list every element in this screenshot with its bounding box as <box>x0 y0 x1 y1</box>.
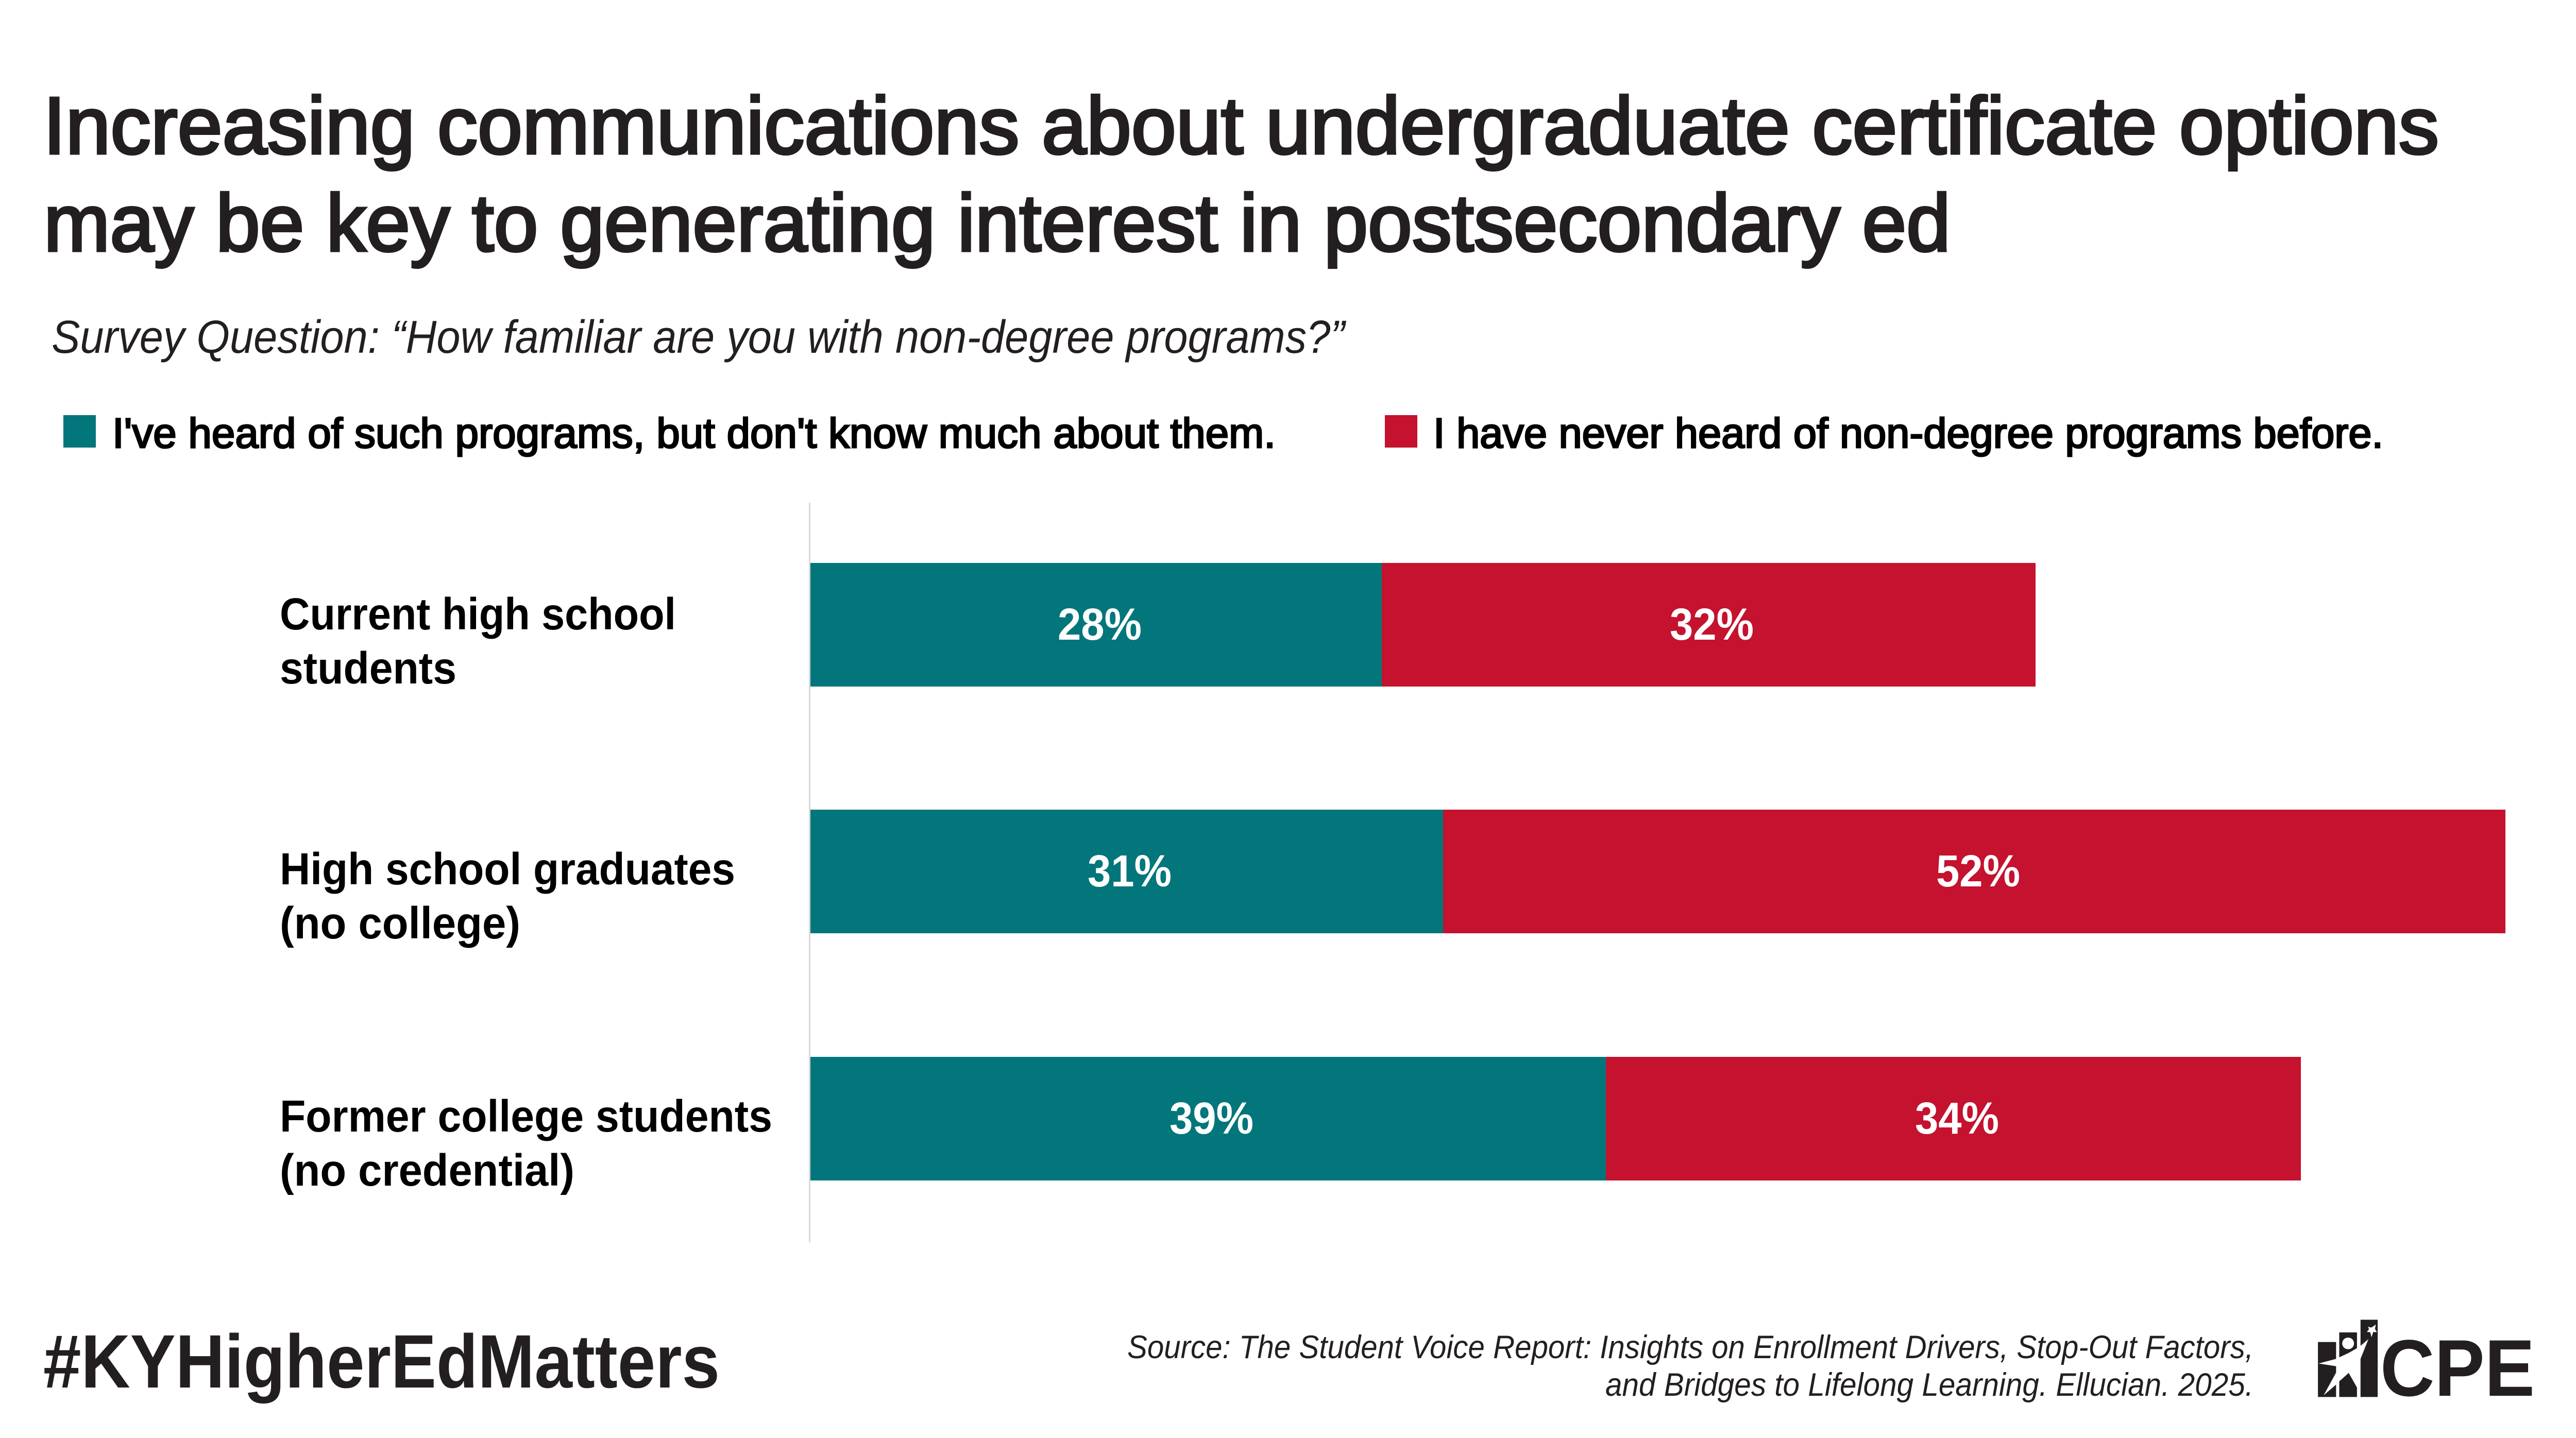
row: current high school students <box>280 563 2036 693</box>
icon: star figure reaching from bars <box>2318 1320 2378 1397</box>
row: former college students: 39% <box>1170 1093 1253 1143</box>
source note: and Bridges to Lifelong Learning. Ellucian. 2025. <box>1605 1367 2253 1403</box>
source note: Source: The Student Voice Report: Insights on Enrollment Drivers, Stop-Out Factors, <box>1127 1329 2253 1365</box>
stacked bar chart <box>280 503 2505 1242</box>
category label <box>280 1091 772 1195</box>
legend <box>63 410 2383 457</box>
legend item: never heard of programs: I have never heard of non-degree programs before. <box>1433 410 2383 457</box>
title: Increasing communications about undergraduate certificate options <box>43 81 2439 171</box>
row: high school graduates <box>280 810 2505 948</box>
survey question subtitle: Survey Question: “How familiar are you with non-degree programs?” <box>52 312 1347 363</box>
category label: students <box>280 643 456 693</box>
row: former college students: 34% <box>1915 1093 1999 1143</box>
logo wordmark: CPE <box>2380 1324 2535 1413</box>
category label: (no credential) <box>280 1145 574 1195</box>
row: current high school students: 32% <box>1670 600 1754 649</box>
legend item: heard of programs: I've heard of such programs, but don't know much about them. <box>112 410 1276 457</box>
row: high school graduates: 52% <box>1936 846 2020 896</box>
row: former college students <box>280 1057 2301 1195</box>
category label: Former college students <box>280 1091 772 1141</box>
category label: Current high school <box>280 589 676 639</box>
source note <box>1127 1329 2253 1403</box>
title: may be key to generating interest in postsecondary ed <box>44 178 1951 268</box>
hashtag: #KYHigherEdMatters <box>43 1320 720 1404</box>
category label <box>280 589 676 693</box>
category label: (no college) <box>280 898 520 948</box>
category label: High school graduates <box>280 844 735 894</box>
row: high school graduates: 31% <box>1088 846 1172 896</box>
row: current high school students: 28% <box>1058 600 1142 649</box>
category label <box>280 844 735 948</box>
title <box>43 81 2439 268</box>
CPE logo <box>2318 1320 2535 1413</box>
